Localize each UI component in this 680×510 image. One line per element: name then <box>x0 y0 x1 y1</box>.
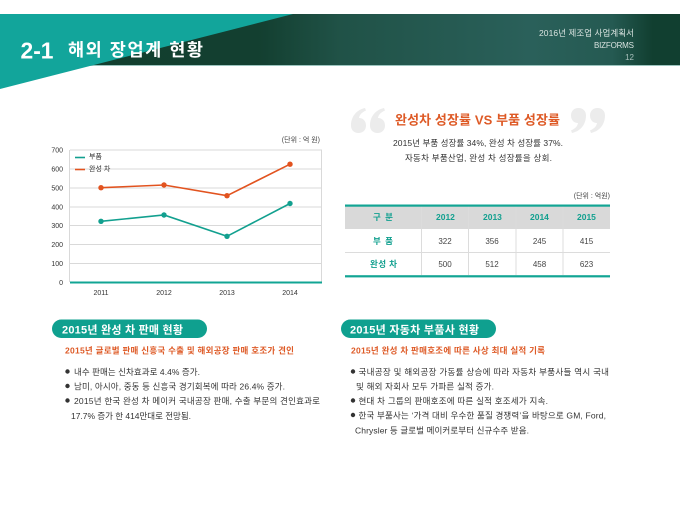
table header labels: 구 분 <box>373 212 393 222</box>
y axis labels: 700 <box>51 148 63 154</box>
row: 완성 차: 500 <box>438 260 452 269</box>
bullet list <box>65 367 320 421</box>
plot frame and gridlines <box>70 150 322 282</box>
table header labels: 2015 <box>577 212 596 222</box>
bullet list: Chrysler 등 글로벌 메이커로부터 신규수주 받음. <box>355 426 529 436</box>
x axis labels <box>93 290 298 297</box>
comparison text: 2015년 부품 성장률 34%, 완성 차 성장률 37%. <box>393 138 563 148</box>
y axis labels: 0 <box>59 280 63 287</box>
bullet list: 및 해외 자회사 모두 가파른 실적 증가. <box>356 382 494 392</box>
series: 부품 <box>98 201 293 239</box>
comparison text <box>393 138 563 163</box>
panel: 2015 finished car sales <box>52 320 320 421</box>
row: 부품 <box>373 236 594 246</box>
section number: 2-1 <box>20 38 54 64</box>
table rules <box>345 205 610 275</box>
row: 부품: 322 <box>438 237 452 246</box>
series: 완성 차 <box>98 162 293 198</box>
document info <box>539 28 635 62</box>
subheading: 2015년 완성 차 판매호조에 따른 사상 최대 실적 기록 <box>351 346 545 356</box>
y axis labels: 100 <box>51 261 63 268</box>
table header labels <box>373 212 596 222</box>
document info: 12 <box>625 53 635 62</box>
bullet list: 2015년 한국 완성 차 메이커 국내공장 판매, 수출 부문의 견인효과로 <box>74 396 320 406</box>
pill heading: 2015년 완성 차 판매 현황 <box>62 322 183 336</box>
y axis labels: 300 <box>51 223 63 230</box>
icon: closing quotation mark <box>571 108 605 133</box>
header teal wedge <box>0 14 293 89</box>
row: 완성 차: 완성 차 <box>370 259 397 269</box>
pill heading <box>52 320 207 338</box>
pill heading <box>341 320 496 338</box>
pill heading: 2015년 자동차 부품사 현황 <box>350 322 479 336</box>
row: 완성 차: 623 <box>580 260 594 269</box>
y axis labels: 400 <box>51 204 63 212</box>
title: 해외 장업계 현황 <box>68 40 203 60</box>
bullet list: 한국 부품사는 ‘가격 대비 우수한 품질 경쟁력’을 바탕으로 GM, Ford, <box>358 410 606 420</box>
chart unit: (단위 : 억 원) <box>282 135 320 144</box>
line chart <box>51 135 322 297</box>
table top border <box>345 204 610 207</box>
row: 완성 차: 458 <box>533 260 547 269</box>
legend <box>75 152 111 173</box>
header band <box>0 14 680 66</box>
y axis labels: 200 <box>51 242 63 249</box>
x axis labels: 2013 <box>219 290 235 297</box>
panel: 2015 auto parts makers <box>341 320 609 436</box>
table header labels: 2012 <box>436 212 455 222</box>
comparison heading: 완성차 성장률 VS 부품 성장률 <box>395 112 560 128</box>
x axis labels: 2011 <box>93 290 109 297</box>
table header labels: 2013 <box>483 212 502 222</box>
row: 완성 차 <box>370 259 594 269</box>
bullet list <box>351 367 609 436</box>
baseline <box>70 282 322 284</box>
subheading: 2015년 글로벌 판매 신흥국 수출 및 해외공장 판매 호조가 견인 <box>65 346 294 356</box>
legend: 부품 <box>89 152 102 160</box>
document info: 2016년 제조업 사업계획서 <box>539 28 634 38</box>
row: 부품: 부 품 <box>373 236 393 246</box>
row: 완성 차: 512 <box>485 260 499 269</box>
table header labels: 2014 <box>530 212 549 222</box>
row: 부품: 415 <box>580 237 594 246</box>
bullet list: 남미, 아시아, 중동 등 신흥국 경기회복에 따라 26.4% 증가. <box>74 382 285 392</box>
row: 부품: 245 <box>533 237 547 246</box>
bullet list: 17.7% 증가 한 414만대로 전망됨. <box>71 411 191 421</box>
y axis labels: 600 <box>51 166 63 174</box>
document info: BIZFORMS <box>594 41 634 50</box>
x axis labels: 2014 <box>282 290 298 297</box>
icon: opening quotation mark <box>351 108 385 133</box>
comparison heading block <box>351 108 605 163</box>
y axis labels: 500 <box>51 186 63 192</box>
table header row <box>345 205 610 229</box>
row: 부품: 356 <box>485 237 499 246</box>
table unit: (단위 : 억원) <box>574 191 610 200</box>
comparison text: 자동차 부품산업, 완성 차 성장률을 상회. <box>405 153 552 163</box>
bullet list: 현대 차 그룹의 판매호조에 따른 실적 호조세가 지속. <box>358 396 548 406</box>
bullet list: 국내공장 및 해외공장 가동률 상승에 따라 자동차 부품사들 역시 국내 <box>358 367 609 377</box>
table bottom border <box>345 275 610 277</box>
bullet list: 내수 판매는 신차효과로 4.4% 증가. <box>74 367 200 377</box>
legend: 완성 차 <box>89 164 111 173</box>
y axis labels <box>51 148 63 287</box>
x axis labels: 2012 <box>156 290 172 297</box>
data table <box>345 191 610 277</box>
